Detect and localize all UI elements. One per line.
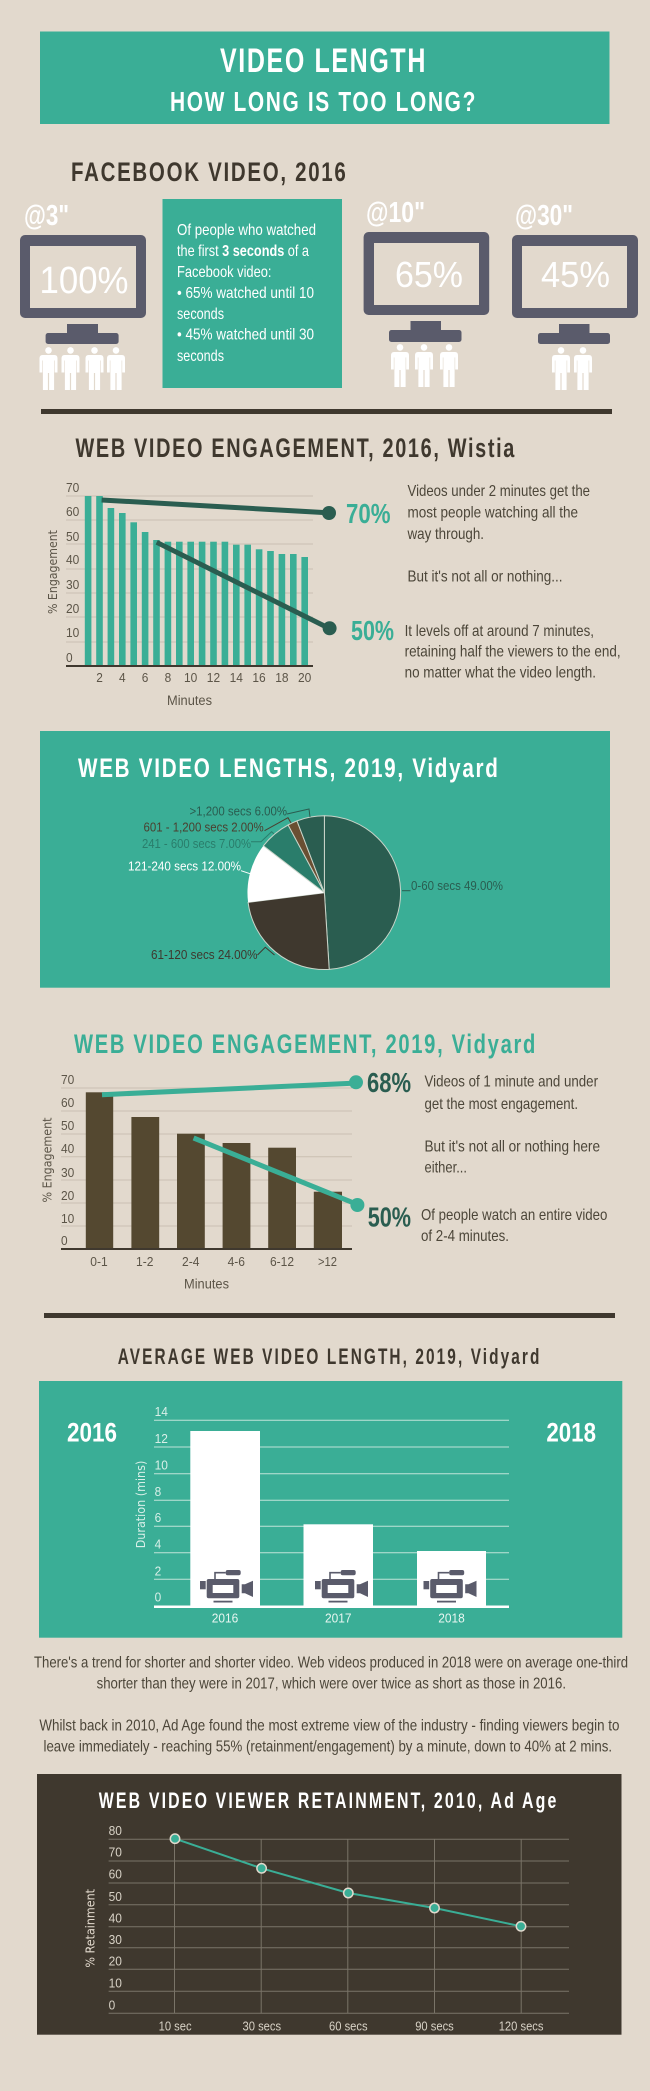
panel: viewer retainment: 30 xyxy=(109,1932,122,1947)
panel: viewer retainment: 30 secs xyxy=(242,2019,282,2034)
bar chart: engagement 2016: 14 xyxy=(230,670,243,685)
monitor: 10 seconds xyxy=(364,197,489,387)
stat: 50%: 50% xyxy=(351,615,394,646)
panel: average length chart: 0 xyxy=(155,1590,161,1605)
icon: four people xyxy=(40,347,125,390)
panel: Facebook explanation: Of people who watched xyxy=(177,222,316,239)
subtitle: HOW LONG IS TOO LONG? xyxy=(170,86,477,117)
leader lines xyxy=(241,809,410,955)
panel: average length chart: 4 xyxy=(155,1536,161,1551)
text: 1 minute and under xyxy=(424,1074,600,1176)
panel: average length chart: 6 xyxy=(155,1510,161,1525)
bar chart: engagement 2019: 40 xyxy=(61,1141,74,1156)
label: at 10 seconds: @10" xyxy=(366,197,425,229)
panel: Facebook explanation: • 65% watched until 10 xyxy=(177,285,314,302)
pie labels: 241 - 600 secs 7.00% xyxy=(142,836,251,851)
label: at 30 seconds: @30" xyxy=(515,200,573,232)
bar chart: engagement 2019: 10 xyxy=(61,1211,74,1226)
panel: viewer retainment: 10 xyxy=(109,1975,122,1990)
bars xyxy=(190,1431,486,1607)
text: under 2 minutes: way through. xyxy=(407,526,484,543)
panel: Facebook explanation: Facebook video: xyxy=(177,264,272,281)
panel: average length chart: 2017 xyxy=(325,1611,352,1626)
panel: average length chart: 12 xyxy=(155,1431,168,1446)
panel: Facebook explanation: seconds xyxy=(177,306,224,323)
bar chart: engagement 2016: 60 xyxy=(66,504,79,519)
axis title: minutes: Minutes xyxy=(167,693,212,708)
panel: viewer retainment: 20 xyxy=(109,1954,122,1969)
label: 2018: 2018 xyxy=(546,1418,596,1448)
text: entire video: Of people watch an entire video xyxy=(421,1207,607,1224)
text: under 2 minutes xyxy=(407,483,590,586)
panel: Facebook explanation: seconds xyxy=(177,348,224,365)
stat: 68%: 68% xyxy=(367,1067,411,1098)
line chart: retainment xyxy=(170,1834,526,1931)
pie labels: 61-120 secs 24.00% xyxy=(151,947,258,962)
bar chart: engagement 2016: 18 xyxy=(275,670,288,685)
panel: Facebook explanation: • 45% watched until 30 xyxy=(177,326,314,344)
text: 1 minute and under: Videos of 1 minute and under xyxy=(424,1074,599,1091)
monitor: 10 seconds: 65% xyxy=(395,254,463,295)
icon: video camera 2016 xyxy=(200,1570,253,1602)
bar chart: engagement 2016: 12 xyxy=(207,670,220,685)
bar chart: engagement 2019: 4-6 xyxy=(228,1254,245,1269)
text: entire video xyxy=(421,1207,607,1245)
bar chart: engagement 2019: 20 xyxy=(61,1188,74,1203)
panel: Facebook explanation xyxy=(162,199,342,388)
trend line: falling xyxy=(194,1138,364,1212)
pie labels: 601 - 1,200 secs 2.00% xyxy=(144,820,264,835)
heading: WEB VIDEO LENGTHS, 2019, Vidyard xyxy=(78,753,500,783)
text: trend xyxy=(34,1655,628,1692)
text: under 2 minutes: But it's not all or nothing... xyxy=(408,569,562,586)
label: 2016: 2016 xyxy=(67,1418,117,1448)
pie labels: 0-60 secs 49.00% xyxy=(411,878,503,893)
bar chart: engagement 2016: 6 xyxy=(142,670,148,685)
text: 1 minute and under: get the most engagement. xyxy=(424,1096,578,1113)
bar chart: engagement 2019 xyxy=(40,1072,364,1292)
panel: average length chart: 2016 xyxy=(212,1611,238,1626)
axis title: retainment: % Retainment xyxy=(84,1889,98,1968)
bar chart: engagement 2016: 4 xyxy=(119,670,126,685)
bar chart: engagement 2019: 30 xyxy=(61,1165,74,1180)
bar chart: engagement 2016: 10 xyxy=(66,625,79,640)
panel: viewer retainment: 0 xyxy=(109,1997,115,2012)
monitor: 30 seconds: 45% xyxy=(541,254,610,295)
stat: 70%: 70% xyxy=(346,498,391,529)
text: levels off: no matter what the video length. xyxy=(405,665,596,682)
panel: viewer retainment: 60 secs xyxy=(329,2019,368,2034)
trend line: top xyxy=(102,1075,363,1095)
panel: viewer retainment: 80 xyxy=(109,1823,122,1838)
bar chart: engagement 2016: 50 xyxy=(66,529,79,544)
bar chart: engagement 2019: 0 xyxy=(61,1233,68,1248)
stat: 50%: 50% xyxy=(368,1202,411,1233)
pie labels: 121-240 secs 12.00% xyxy=(128,859,241,874)
bar chart: engagement 2016: 2 xyxy=(96,670,103,685)
panel: average length chart: 14 xyxy=(155,1404,168,1419)
bar chart: engagement 2016: 0 xyxy=(66,650,73,665)
text: trend: shorter than they were in 2017, which were over twice as short as those in 2016. xyxy=(97,1675,566,1692)
pie labels xyxy=(128,804,503,962)
bar chart: engagement 2016: 20 xyxy=(66,601,79,616)
title: VIDEO LENGTH xyxy=(220,42,427,80)
bar chart: engagement 2016: 40 xyxy=(66,552,79,567)
pie chart xyxy=(247,816,401,970)
panel: viewer retainment xyxy=(37,1774,622,2035)
icon: three people xyxy=(391,344,458,387)
axis title: duration: Duration (mins) xyxy=(134,1461,148,1548)
bar chart: engagement 2016: 8 xyxy=(165,670,171,685)
bar chart: engagement 2016: 16 xyxy=(252,670,266,685)
text: 1 minute and under: But it's not all or nothing here xyxy=(424,1139,600,1156)
bar chart: engagement 2019: >12 xyxy=(318,1254,337,1269)
axis title: engagement: % Engagement xyxy=(46,530,60,614)
text: levels off xyxy=(405,623,621,682)
bar chart: engagement 2016 xyxy=(46,480,337,708)
bar chart: engagement 2019: 0-1 xyxy=(90,1254,108,1269)
heading: Facebook video: FACEBOOK VIDEO, 2016 xyxy=(71,157,348,187)
panel: average length chart: 2 xyxy=(155,1563,161,1578)
panel: average length chart: 2018 xyxy=(438,1611,465,1626)
panel: viewer retainment: 40 xyxy=(109,1911,122,1926)
bar chart: engagement 2019: 50 xyxy=(61,1118,74,1133)
panel: viewer retainment: 50 xyxy=(109,1889,122,1904)
icon: video camera 2018 xyxy=(424,1570,476,1602)
panel: average length chart xyxy=(39,1381,622,1638)
panel: web video lengths xyxy=(40,731,610,988)
panel: Facebook explanation: the first 3 seconds of a xyxy=(177,243,309,260)
bar chart: engagement 2016: 20 xyxy=(298,670,311,685)
bar chart: engagement 2016: 10 xyxy=(184,670,197,685)
bar chart: engagement 2016: 70 xyxy=(66,480,79,495)
bar chart: engagement 2019: 1-2 xyxy=(136,1254,153,1269)
text: under 2 minutes: Videos under 2 minutes get the xyxy=(408,483,590,500)
panel: average length chart: 8 xyxy=(155,1484,161,1499)
monitor: 3 seconds: 100% xyxy=(40,260,128,302)
bar chart: engagement 2019: 2-4 xyxy=(182,1254,199,1269)
panel: average length chart: 10 xyxy=(155,1458,168,1473)
icon: video camera 2017 xyxy=(315,1570,368,1602)
bar chart: engagement 2019: 6-12 xyxy=(270,1254,294,1269)
panel: viewer retainment: 90 secs xyxy=(415,2019,454,2034)
trend line: falling xyxy=(157,542,337,635)
panel: viewer retainment: 10 sec xyxy=(159,2019,192,2034)
text: back in 2010 xyxy=(39,1717,619,1755)
trend line: top xyxy=(102,500,336,520)
panel: viewer retainment: 70 xyxy=(109,1845,122,1860)
pie labels: >1,200 secs 6.00% xyxy=(190,804,287,819)
bar chart: engagement 2016: 30 xyxy=(66,577,79,592)
heading: web video engagement 2016: WEB VIDEO ENGAGEMENT, 2016, Wistia xyxy=(76,433,516,463)
axis title: engagement: % Engagement xyxy=(40,1117,54,1202)
panel: viewer retainment: 60 xyxy=(109,1867,122,1882)
text: under 2 minutes: most people watching all the xyxy=(408,505,578,522)
monitor: 30 seconds xyxy=(512,200,638,390)
bar chart: engagement 2019: 70 xyxy=(61,1072,74,1087)
panel: viewer retainment: 120 secs xyxy=(499,2019,544,2034)
title banner xyxy=(40,32,610,124)
axis title: minutes: Minutes xyxy=(184,1277,229,1292)
text: entire video: of 2-4 minutes. xyxy=(421,1228,509,1245)
text: 1 minute and under: either... xyxy=(424,1159,467,1176)
icon: two people xyxy=(552,347,592,390)
monitor: 3 seconds xyxy=(20,200,146,390)
text: levels off: It levels off at around 7 minutes, xyxy=(405,623,594,640)
label: at 3 seconds: @3" xyxy=(24,200,69,232)
bar chart: engagement 2019: 60 xyxy=(61,1095,74,1110)
